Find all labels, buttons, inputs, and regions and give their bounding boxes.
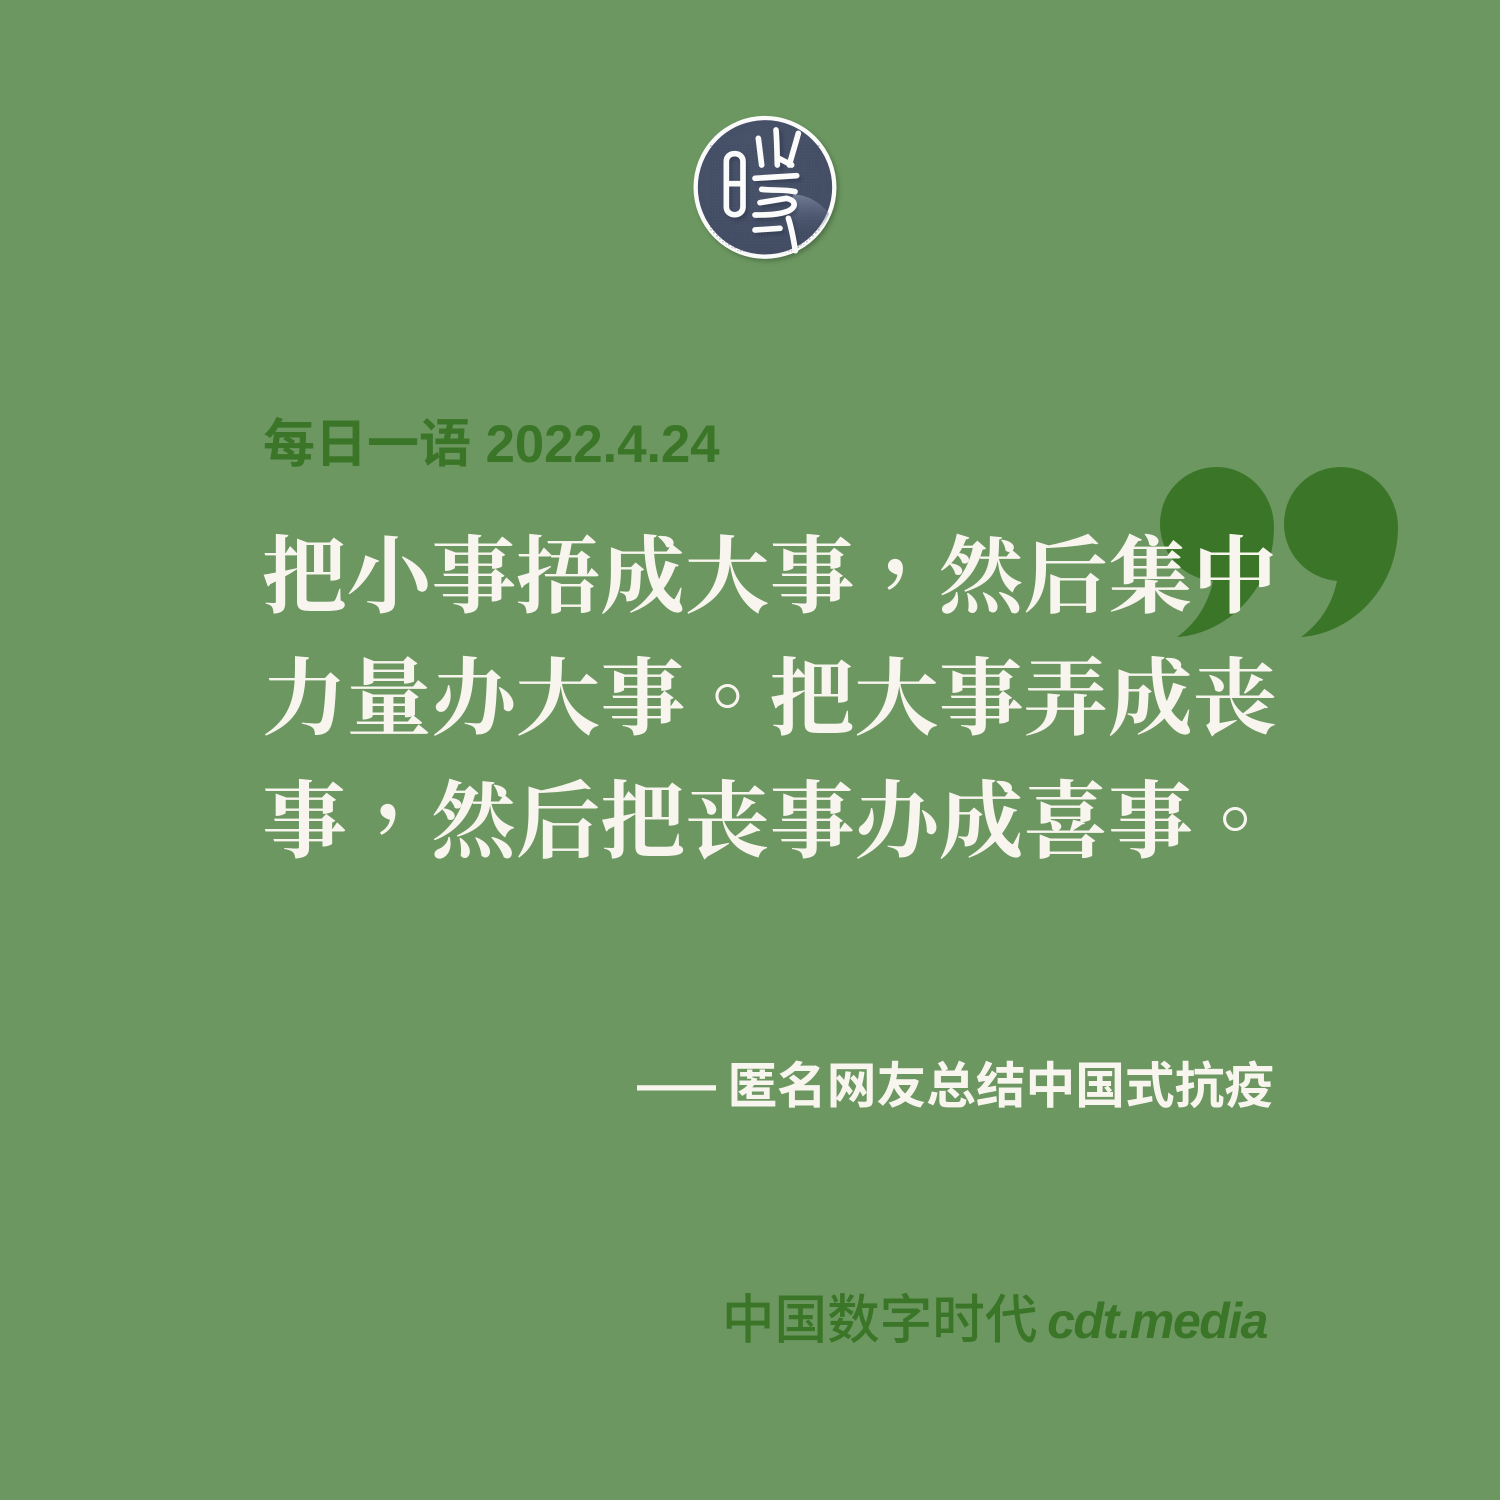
quote text: 事 ，然后把丧事办成喜事 。	[262, 742, 1304, 870]
date heading: 每日一语 2022.4.24	[263, 415, 719, 474]
quote text	[262, 497, 1304, 870]
icon: round logo seal	[694, 116, 840, 263]
quote text: 力量办大事 。把大事弄成丧	[262, 627, 1277, 747]
attribution: —	[637, 1036, 716, 1125]
footer brand: 中国数字时代 cdt.media	[722, 1291, 1267, 1350]
attribution	[637, 1036, 1274, 1125]
quote text: 把小事捂成大事 ，然后集中	[262, 497, 1277, 625]
attribution: 匿名网友总结中国式抗疫	[727, 1058, 1274, 1114]
